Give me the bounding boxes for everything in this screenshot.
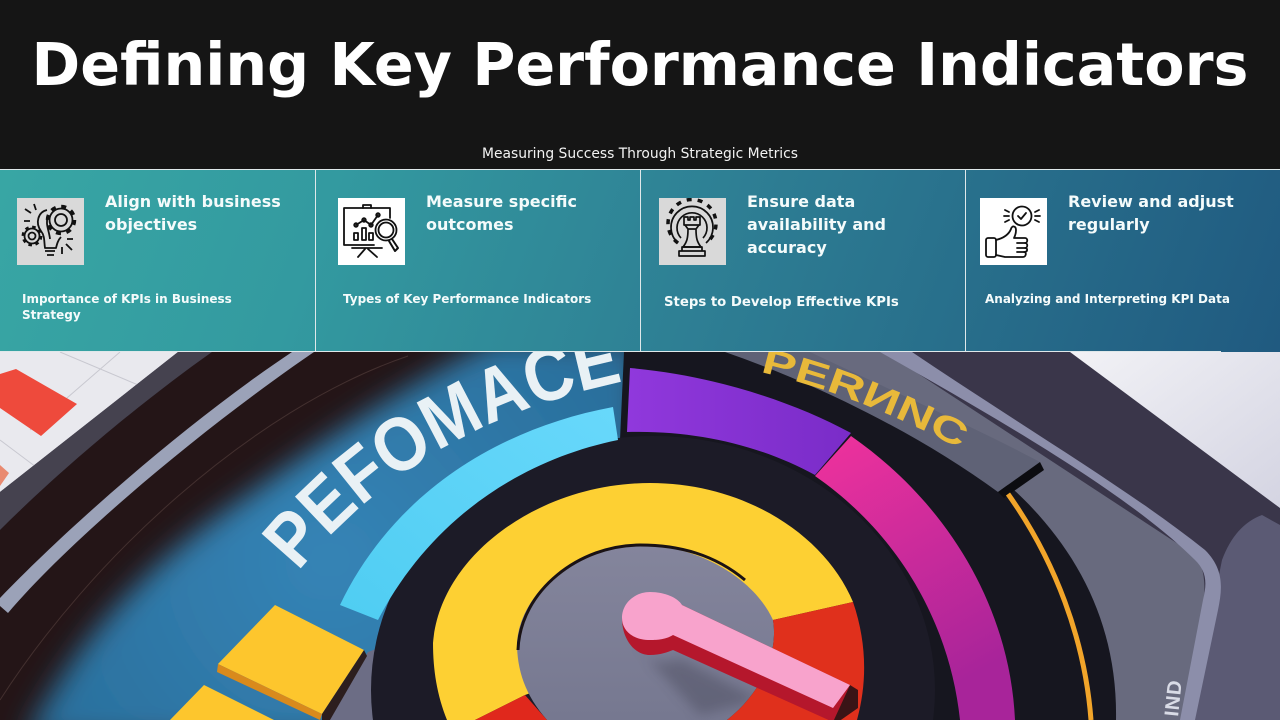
blue dial face — [25, 340, 640, 720]
magenta arc — [815, 436, 1015, 720]
purple arc — [627, 368, 851, 475]
gauge centre — [517, 545, 774, 720]
yellow gauge ring — [433, 483, 853, 720]
description: analyzing: Analyzing and Interpreting KPI Data — [985, 292, 1230, 306]
black outer dial — [620, 352, 1116, 720]
description: steps: Steps to Develop Effective KPIs — [664, 294, 899, 310]
subtitle: Measuring Success Through Strategic Metrics — [482, 146, 798, 162]
description: importance: Importance of KPIs in Business Strategy — [22, 292, 232, 322]
heading: ensure: Ensure data availability and accuracy — [747, 192, 886, 257]
bezel highlight line — [0, 356, 408, 700]
needle side — [622, 605, 850, 720]
yellow square one — [218, 605, 364, 714]
heading: measure: Measure specific outcomes — [426, 192, 577, 234]
yellow square two — [170, 685, 274, 720]
icon: chess rook in gear — [659, 198, 726, 265]
grey wedge below blue — [322, 640, 400, 720]
needle — [622, 592, 858, 720]
title: Defining Key Performance Indicators — [32, 31, 1248, 99]
cyan arc — [340, 407, 618, 620]
right body shade — [1190, 515, 1280, 720]
chart small tile — [0, 465, 9, 486]
body background — [0, 352, 1280, 720]
icon: lightbulb with gears — [17, 198, 84, 265]
grey rim strip left — [0, 352, 314, 613]
heading: align: Align with business objectives — [105, 192, 281, 234]
needle top — [622, 592, 850, 708]
grey band carrying yellow text — [725, 352, 1040, 492]
chart grid lines — [0, 352, 150, 470]
yellow square one edge — [217, 664, 322, 720]
inner rim shadow — [518, 545, 745, 650]
red segment right — [727, 602, 864, 720]
image: performance gauge dashboard — [0, 352, 1280, 720]
needle cast shadow — [635, 645, 760, 715]
red chart block — [0, 369, 77, 436]
light desk top left — [0, 352, 178, 492]
orange thin line — [1008, 494, 1091, 720]
needle end cap — [833, 685, 858, 720]
icon: presentation board with magnifier — [338, 198, 405, 265]
brown bezel — [0, 352, 640, 720]
inner dark ring — [371, 436, 935, 720]
yellow square one shadow — [322, 650, 367, 720]
band edge shadow — [998, 462, 1044, 498]
grey rim strip right — [880, 352, 1221, 720]
label: IND: IND — [1161, 679, 1187, 718]
light desk top right — [1070, 352, 1280, 508]
icon: thumbs up with check — [980, 198, 1047, 265]
grey inner panel — [800, 352, 1204, 720]
description: types: Types of Key Performance Indicators — [343, 292, 591, 306]
heading: review: Review and adjust regularly — [1068, 192, 1234, 234]
dark bezel left — [0, 352, 212, 530]
panel strip: four KPI topics — [0, 169, 1280, 352]
red segment bottom left — [475, 695, 547, 720]
